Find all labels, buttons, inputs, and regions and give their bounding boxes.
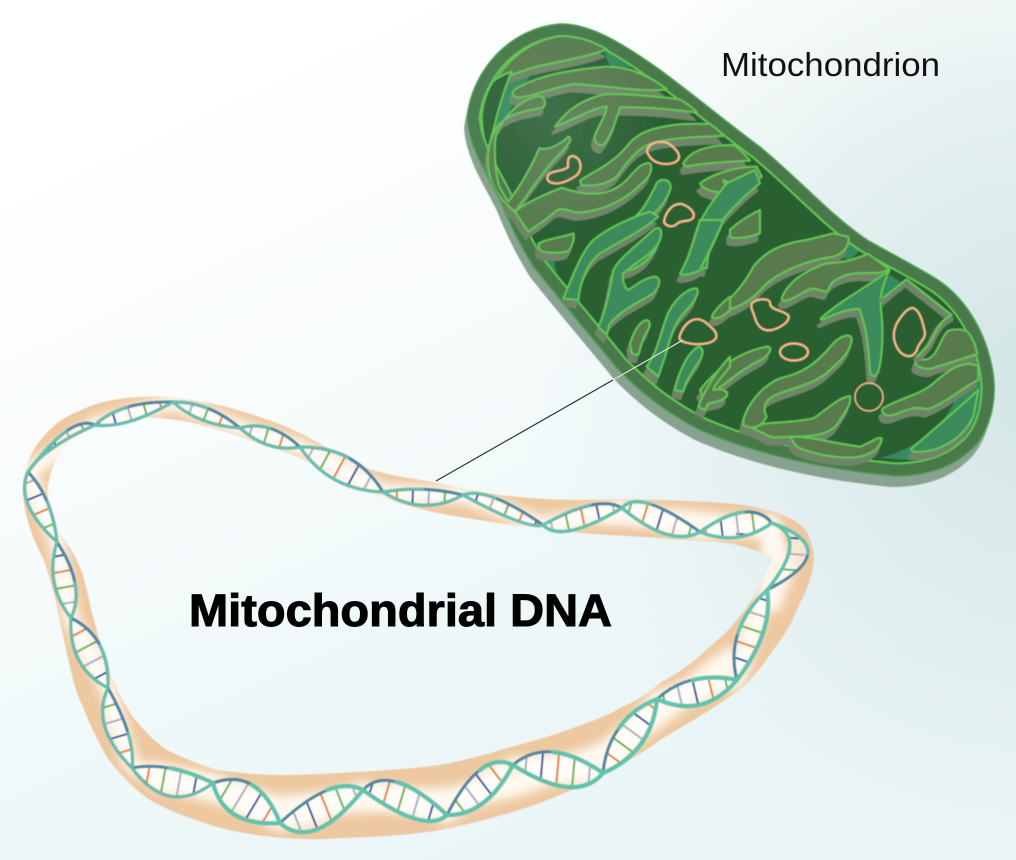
- leader line: [436, 340, 683, 481]
- band highlight: [28, 402, 785, 823]
- DNA loop: [22, 396, 814, 840]
- label: mitochondrion: Mitochondrion: [721, 46, 940, 83]
- label: mitochondrial DNA: Mitochondrial DNA: [189, 585, 612, 636]
- DNA front strand: medium arcs: [543, 502, 808, 633]
- DNA front strand: thick arcs: [170, 590, 768, 832]
- sheen: [483, 53, 636, 200]
- mitochondrion: [440, 0, 994, 487]
- outer compartment rim: [467, 24, 994, 476]
- cristae faces: teal: [563, 170, 978, 452]
- DNA rungs: [28, 402, 772, 823]
- outer membrane edge: [467, 24, 994, 476]
- matrix pocket walls: [881, 279, 952, 361]
- cristae walls: [485, 43, 976, 465]
- DNA loop band: [23, 396, 814, 839]
- teal intermembrane patches: [480, 52, 986, 462]
- DNA back strands: [25, 402, 808, 832]
- helix interior: [26, 403, 806, 830]
- mitochondrial DNA loops: [547, 142, 925, 411]
- DNA front strand: thin arcs: [25, 402, 590, 797]
- mitochondrion lower wall: [464, 35, 991, 487]
- mitochondrion body: [440, 0, 994, 476]
- cristae faces: olive: [488, 36, 978, 458]
- matrix wedge upper left: [482, 72, 512, 148]
